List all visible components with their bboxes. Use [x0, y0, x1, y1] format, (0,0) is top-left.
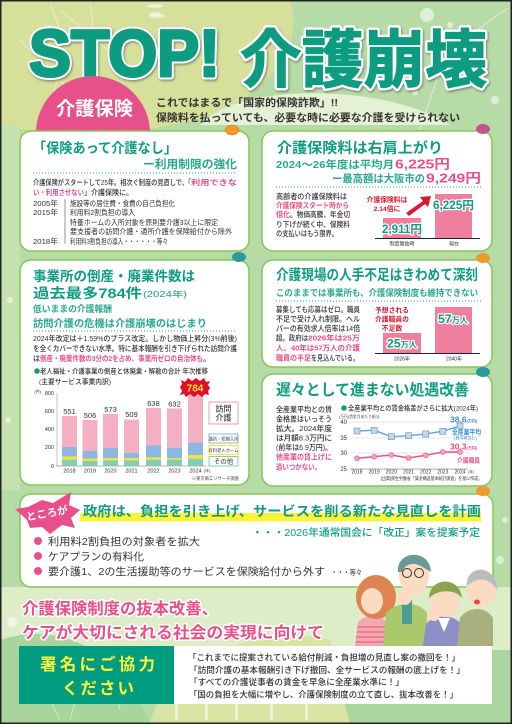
chart: wage lines: 2024 — [454, 470, 466, 476]
panel: 介護現場の人手不足 — [262, 260, 492, 367]
panel: 保険あって介護なし: 利用料3割負担の導入・・・・・・等々 — [70, 237, 168, 246]
chart: wage lines: 40 — [340, 420, 348, 426]
chart: stacked bars: 800 — [45, 391, 54, 397]
panel: 事業所の倒産・廃業件数 — [20, 260, 249, 485]
chart: stacked bars: 2021 — [125, 468, 138, 474]
panel: 保険あって介護なし: 2005年 — [33, 199, 58, 208]
panel: 遅々として進まない処遇改善: 拡大。2024年度 — [276, 423, 333, 433]
chart: wage lines — [339, 404, 482, 482]
chart: stacked bars: 573 — [104, 405, 117, 414]
title: 介護崩壊 — [240, 26, 487, 96]
chart: premium bars: 2,911円 — [382, 223, 422, 236]
chart: shortage bars: 2026年 — [394, 356, 410, 362]
panel: 保険あって介護なし: 利用できな — [191, 177, 238, 187]
panel: 遅々として進まない処遇改善 — [262, 374, 492, 486]
chart: stacked bars: 400 — [45, 427, 54, 433]
panel: 遅々として進まない処遇改善: 遅々として進まない処遇改善 — [276, 381, 469, 399]
panel: 保険あって介護なし: 2015年 — [33, 208, 58, 217]
signature box: ください — [62, 679, 134, 698]
panel: 介護現場の人手不足: 職員の不足 — [276, 352, 311, 362]
panel: 介護保険料は右肩上がり: り下げが続く中、保険料 — [276, 219, 350, 229]
panel: 事業所の倒産・廃業件数: 。 — [203, 354, 210, 363]
panel: 事業所の倒産・廃業件数: 老人福祉・介護事業の倒産と休廃業・解散の合計 年次推移 — [40, 366, 208, 376]
chart: wage lines: 30 — [340, 451, 348, 457]
panel: 介護保険料は右肩上がり — [262, 131, 492, 251]
legend: 有料老人ホーム — [209, 447, 239, 454]
panel: 介護保険料は右肩上がり: 介護保険料は右肩上がり — [277, 139, 443, 157]
chart: premium bars: 2.14倍に — [374, 204, 401, 213]
panel: 事業所の倒産・廃業件数: 倒産・廃業件数の3分の2を占め、事業所ゼロの自治体も — [40, 354, 203, 363]
chart: wage lines: 2020 — [386, 470, 397, 476]
chart: stacked bars: 632 — [168, 400, 181, 408]
chart: stacked bars: (件) — [34, 388, 42, 394]
chart: stacked bars: 0 — [51, 464, 54, 470]
panel: 介護現場の人手不足: 2026年は25万 — [308, 332, 361, 342]
panel: 介護保険料は右肩上がり: 2024～26年度は平均月 — [276, 158, 394, 171]
panel: 事業所の倒産・廃業件数: (主要サービス事業内訳) — [39, 377, 111, 386]
chart: shortage bars: 2040年 — [446, 356, 462, 362]
panel: 政府は見直しを計画: 要介護1、2の生活援助等のサービスを保険給付から外す — [48, 565, 325, 578]
chart: stacked bars: 2018 — [63, 468, 76, 474]
panel: 介護現場の人手不足: 募集しても応募はゼロ。職員 — [276, 304, 360, 314]
panel: 介護現場の人手不足: このままでは事業所も、介護保険制度も維持できない — [276, 287, 478, 298]
panel: 政府は見直しを計画: ケアプランの有料化 — [48, 550, 145, 563]
chart: stacked bars: 506 — [84, 411, 96, 420]
chart: stacked bars: (年) — [204, 467, 211, 473]
panel: 保険あって介護なし: ー利用制限の強化 — [143, 157, 238, 171]
legend: 通所・短期入所 — [208, 436, 239, 443]
panel: 政府は見直しを計画: ・・・2026年通常国会に「改正」案を提案予定 — [252, 526, 480, 539]
panel: 介護保険料は右肩上がり: 。物価高騰、年金切 — [290, 209, 350, 219]
callout: 784 — [180, 378, 210, 397]
chart: wage lines: (賞与等含む) — [454, 434, 477, 440]
chart: premium bars — [367, 194, 480, 248]
panel: 介護保険料は右肩上がり: 介護保険スタート時から — [276, 200, 349, 210]
chart: stacked bars: 2023 — [168, 468, 181, 474]
chart: stacked bars — [34, 378, 240, 482]
panel: 政府は見直しを計画: 政府は、負担を引き上げ、サービスを削る新たな見直しを計画 — [83, 503, 481, 519]
panel: 介護現場の人手不足: 超。政府は — [276, 332, 308, 342]
chart: wage lines: 2018 — [351, 470, 363, 476]
chart: wage lines: 2019 — [369, 470, 380, 476]
chart: stacked bars: 2019 — [84, 468, 96, 474]
panel: 保険あって介護なし: 特養ホームの入所対象を原則要介護3以上に限定 — [70, 218, 218, 227]
decorative pills — [225, 124, 490, 496]
panel: 保険あって介護なし — [20, 131, 249, 251]
chart: stacked bars: 600 — [45, 409, 54, 415]
panel: 保険あって介護なし: 施設等の居住費・食費の自己負担化 — [70, 199, 176, 208]
chart: wage lines: 2023 — [437, 470, 449, 476]
chart: stacked bars: 638 — [147, 399, 160, 408]
panel: 介護保険料は右肩上がり: 倍化 — [276, 209, 290, 219]
panel: 遅々として進まない処遇改善: 追いつかない。 — [276, 462, 321, 472]
title: STOP! — [29, 16, 220, 90]
panel: 遅々として進まない処遇改善: 他産業の賃上げに — [276, 452, 332, 462]
illustration: four people — [355, 555, 497, 646]
panel: 介護現場の人手不足: 人、40年は57万人の介護 — [276, 342, 360, 352]
chart: wage lines: 2022 — [420, 470, 431, 476]
panel: 介護保険料は右肩上がり: ー最高額は大阪市の — [332, 172, 425, 185]
chart: shortage bars: 57万人 — [438, 312, 468, 326]
chart: wage lines: 全産業平均との賃金格差がさらに拡大(2024年) — [348, 404, 478, 412]
legend — [208, 402, 239, 466]
chart: stacked bars: ※東京商工リサーチ調査 — [192, 475, 240, 482]
chart: shortage bars: 予想される — [375, 306, 409, 314]
panel: 保険あって介護なし: 介護保険がスタートして25年。相次ぐ制度の見直しで、「 — [33, 177, 191, 187]
heading: 抜本改善 — [22, 599, 324, 642]
panel: 保険あって介護なし: 2018年 — [33, 237, 58, 246]
legend: 訪問 — [216, 404, 232, 414]
chart: wage lines: 2021 — [403, 470, 414, 476]
panel: 事業所の倒産・廃業件数: 低いままの介護報酬 — [33, 303, 112, 314]
panel: 遅々として進まない処遇改善: は月額8.3万円に — [276, 432, 332, 442]
chart: premium bars: 制度開始時 — [389, 240, 415, 248]
lead text: これではまるで「国家的保険詐欺」!! — [156, 96, 338, 109]
chart: stacked bars: 2020 — [104, 468, 117, 474]
chart: shortage bars — [375, 306, 480, 362]
badge: 介護保険: 介護保険 — [56, 98, 133, 120]
panel: 事業所の倒産・廃業件数: 過去最多784件 — [33, 285, 143, 301]
panel: 介護保険料は右肩上がり: の支払いはもう限界。 — [276, 228, 338, 238]
chart: wage lines: 30.3(万円) — [450, 442, 478, 452]
chart: wage lines: 全産業平均 — [452, 428, 481, 436]
panel: 保険あって介護なし: 「保険あって介護なし」 — [33, 140, 177, 156]
chart: stacked bars: 551 — [63, 407, 76, 416]
chart: wage lines: (万円)賃金月あたり給与 — [339, 414, 380, 419]
lead text — [156, 96, 460, 124]
signature box: 「これまでに提案されている給付削減・負担増の見直し案の撤回を！」 — [188, 652, 460, 662]
panel: 介護保険料は右肩上がり: 9,249円 — [426, 170, 481, 186]
panel: 保険あって介護なし: 」介護保険に。 — [84, 187, 133, 197]
chart: stacked bars: 200 — [45, 445, 54, 451]
panel: 保険あって介護なし: 利用料2割負担の導入 — [70, 208, 136, 217]
chart: wage lines: 介護職員 — [457, 456, 480, 464]
title — [29, 16, 487, 96]
signature box: 「訪問介護の基本報酬引き下げ撤回、全サービスの報酬の底上げを！」 — [189, 665, 465, 675]
burst: ところが: ところが — [25, 503, 69, 524]
panel: 遅々として進まない処遇改善: 全産業平均との賃 — [276, 404, 332, 414]
chart: shortage bars: 介護職員の — [375, 314, 409, 324]
callout: 784: 784 — [187, 384, 204, 394]
chart: wage lines: 35 — [340, 436, 348, 442]
chart: wage lines: (年) — [468, 469, 474, 474]
title: 介護崩壊 — [240, 26, 487, 96]
panel: 保険あって介護なし: い・利用させない — [33, 187, 84, 197]
chart: stacked bars: 509 — [125, 410, 138, 419]
panel: 政府は見直しを計画 — [20, 494, 493, 587]
panel: 事業所の倒産・廃業件数: (2024年) — [143, 289, 187, 299]
panel: 事業所の倒産・廃業件数: を全くカバーできない水準。特に基本報酬を引き下げられた訪問介護 — [33, 344, 238, 353]
chart: premium bars: 6,225円 — [433, 199, 474, 212]
panel: 遅々として進まない処遇改善: (前年は6.9万円)。 — [276, 442, 332, 452]
chart: shortage bars: 不足数 — [382, 324, 402, 332]
heading: 抜本改善: 介護保険制度の抜本改善、 — [22, 599, 218, 618]
chart: shortage bars: 25万人 — [387, 336, 417, 350]
panel: 事業所の倒産・廃業件数: 2024年改定は＋1.59%のプラス改定。しかし物価上昇分(3%前後) — [33, 334, 237, 343]
title: STOP! — [29, 16, 220, 90]
panel: 政府は見直しを計画: 利用料2割負担の対象者を拡大 — [48, 535, 201, 548]
signature box: 「すべての介護従事者の賃金を早急に全産業水準に！」 — [189, 677, 404, 687]
badge: 介護保険 — [36, 76, 150, 190]
lead text: 保険料を払っていても、必要な時に必要な介護を受けられない — [156, 111, 460, 124]
chart: premium bars: 現在 — [449, 240, 459, 248]
chart: premium bars: 介護保険料は — [367, 195, 408, 204]
burst: ところが — [15, 492, 80, 534]
panel: 介護現場の人手不足: を見込んでいる。 — [311, 354, 359, 362]
panel: 保険あって介護なし: 要支援者の訪問介護・通所介護を保険給付から除外 — [70, 227, 233, 236]
signature box: 「国の負担を大幅に増やし、介護保険制度の立て直し、抜本改善を！」 — [189, 690, 458, 700]
panel: 事業所の倒産・廃業件数: 訪問介護の危機は介護崩壊のはじまり — [33, 317, 207, 330]
chart: wage lines: 38.6(万円) — [450, 414, 478, 424]
panel: 政府は見直しを計画: ・・・等々 — [331, 567, 362, 577]
panel: 介護現場の人手不足: パーの有効求人倍率は14倍 — [276, 323, 360, 333]
chart: wage lines: [出典]厚生労働省「賃金構造基本統計調査」を基に作成。 — [381, 475, 482, 482]
chart: wage lines: 25 — [340, 467, 348, 473]
chart: stacked bars: 2024 — [189, 468, 202, 474]
heading: 抜本改善: ケアが大切にされる社会の実現に向けて — [22, 623, 324, 642]
signature box — [19, 646, 492, 704]
chart: stacked bars: 2022 — [147, 468, 160, 474]
panel: 事業所の倒産・廃業件数: 事業所の倒産・廃業件数は — [33, 268, 195, 284]
panel: 事業所の倒産・廃業件数: は — [33, 354, 40, 363]
panel: 遅々として進まない処遇改善: 金格差はいっそう — [276, 414, 332, 424]
signature box: 署名にご協力 — [40, 654, 155, 674]
panel: 介護現場の人手不足: 不足で受け入れ制限。ヘル — [276, 314, 360, 324]
legend: 介護 — [216, 412, 232, 422]
panel: 介護保険料は右肩上がり: 6,225円 — [395, 156, 450, 172]
legend: その他 — [214, 456, 234, 466]
panel: 介護保険料は右肩上がり: 高齢者の介護保険料は — [276, 191, 347, 201]
panel: 介護現場の人手不足: 介護現場の人手不足はきわめて深刻 — [276, 266, 478, 284]
